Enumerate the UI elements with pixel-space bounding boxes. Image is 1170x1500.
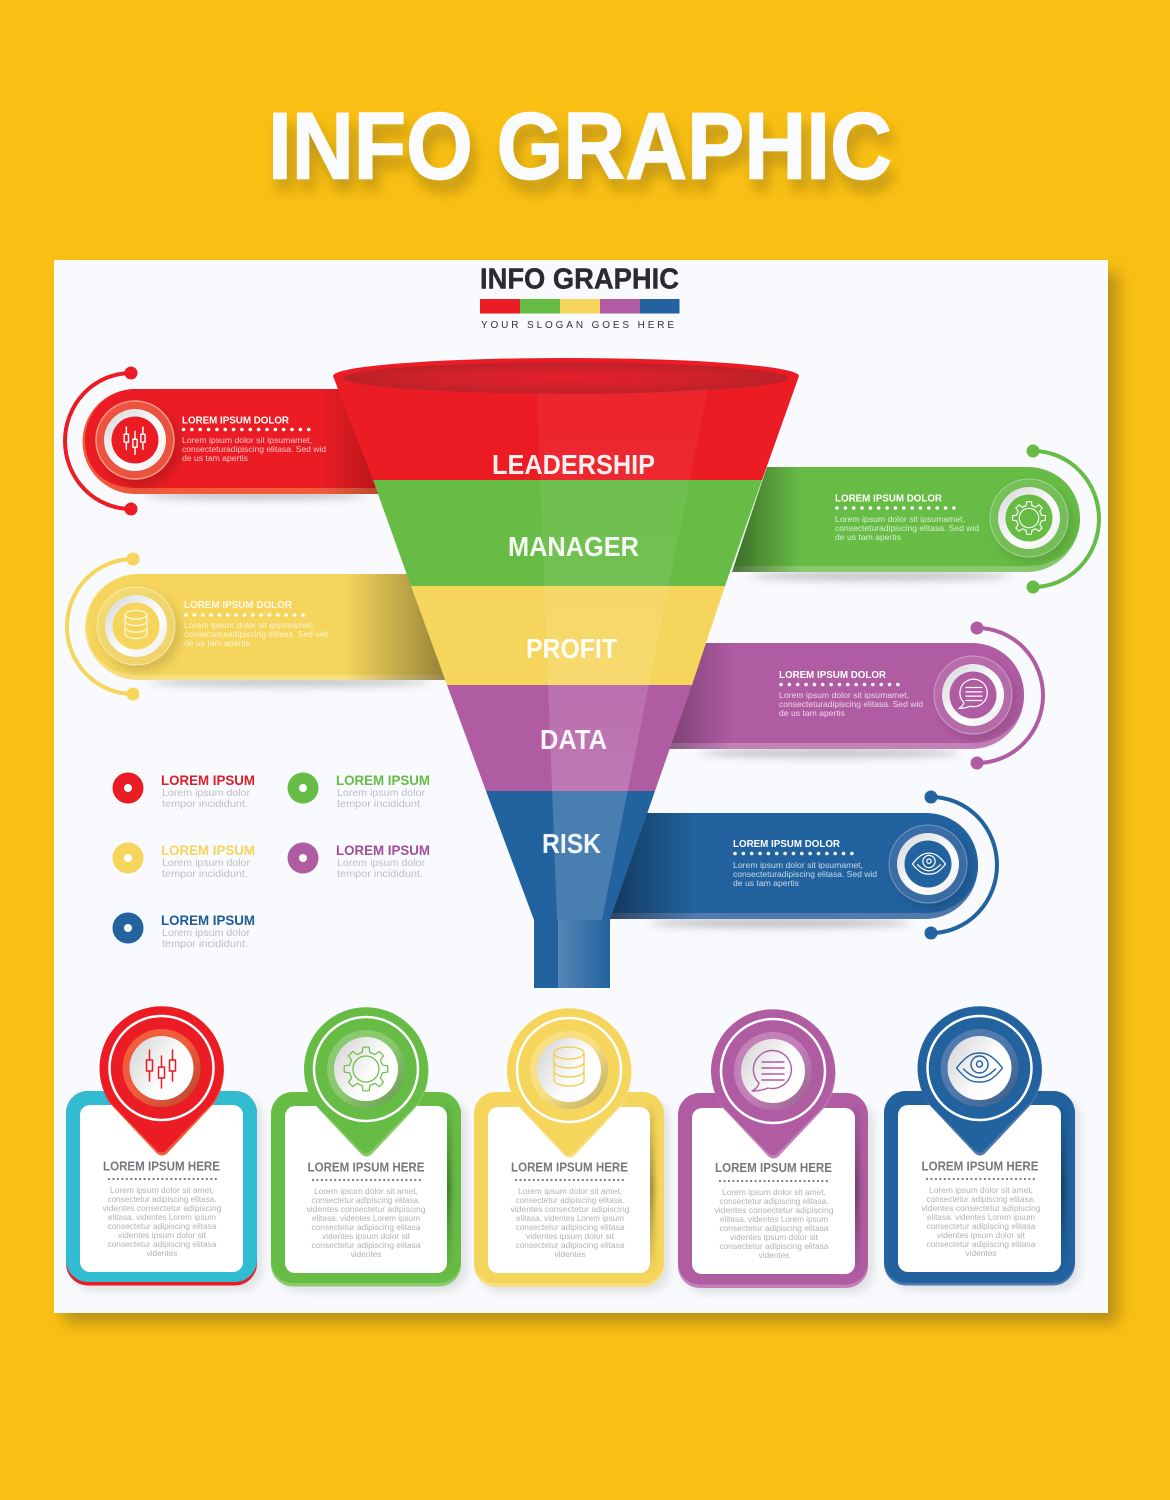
- card text: videntes ipsum dolor sit: [322, 1232, 411, 1241]
- card frame: [66, 1091, 263, 1291]
- funnel mouth: [343, 362, 789, 394]
- card pin: [304, 1007, 428, 1156]
- legend item: red: tempor incididunt.: [162, 799, 248, 810]
- card 3: yellow: [474, 1008, 670, 1293]
- band shape: [668, 643, 1024, 749]
- logo title: INFO GRAPHIC: [480, 264, 679, 296]
- legend item: purple: tempor incididunt.: [337, 869, 423, 880]
- band text: LOREM IPSUM DOLOR: [184, 599, 292, 611]
- band text: LOREM IPSUM DOLOR: [182, 414, 289, 426]
- card text: consectetur adipiscing elitasa.: [516, 1196, 624, 1205]
- card text: videntes consectetur adipiscing: [714, 1206, 834, 1215]
- band text: consecteturadipiscing elitasa. Sed wid: [733, 870, 877, 879]
- label: data: DATA: [540, 724, 607, 755]
- card 4: purple: [678, 1009, 874, 1294]
- band shape: [610, 813, 978, 919]
- card frame: [678, 1093, 874, 1294]
- label: risk: RISK: [542, 828, 601, 859]
- card text: videntes ipsum dolor sit: [526, 1232, 615, 1241]
- band text: [779, 669, 923, 718]
- band: blue: [610, 790, 997, 940]
- legend item: yellow: [112, 842, 255, 880]
- band text: Lorem ipsum dolor sit ipsumamet,: [733, 861, 863, 870]
- title: INFO GRAPHIC: [268, 94, 892, 200]
- card frame: [474, 1092, 670, 1293]
- band arc: [65, 366, 138, 516]
- card text: videntes ipsum dolor sit: [118, 1231, 207, 1240]
- legend item: purple: LOREM IPSUM: [336, 842, 430, 858]
- card text: videntes consectetur adipiscing: [922, 1204, 1040, 1213]
- panel shadow: [64, 272, 1118, 1323]
- card text: consectetur adipiscing elitasa: [312, 1241, 421, 1250]
- card text: elitasa. videntes Lorem ipsum: [312, 1214, 420, 1223]
- card 5: blue: [884, 1006, 1081, 1291]
- legend item: red: Lorem ipsum dolor: [162, 788, 251, 799]
- legend item: blue: Lorem ipsum dolor: [162, 928, 251, 939]
- band text: [835, 492, 979, 542]
- legend item: yellow: tempor incididunt.: [162, 869, 248, 880]
- band text: Lorem ipsum dolor sit ipsumamet,: [835, 515, 965, 524]
- band text: consecteturadipiscing elitasa. Sed wid: [182, 445, 326, 454]
- legend item: green: LOREM IPSUM: [336, 772, 430, 788]
- card text: elitasa. videntes Lorem ipsum: [108, 1213, 216, 1222]
- band icon: [934, 656, 1012, 734]
- card text: [306, 1160, 426, 1259]
- card frame: [884, 1091, 1081, 1291]
- legend item: red: LOREM IPSUM: [161, 772, 255, 788]
- band text: Lorem ipsum dolor sit ipsumamet,: [779, 691, 909, 700]
- card pin: [918, 1006, 1042, 1156]
- card text: LOREM IPSUM HERE: [511, 1160, 628, 1174]
- card text: videntes: [966, 1249, 996, 1258]
- card text: consectetur adipiscing elitasa: [516, 1241, 625, 1250]
- label: profit: PROFIT: [526, 633, 617, 664]
- band icon: [889, 825, 967, 903]
- band: yellow: [67, 552, 450, 700]
- band icon: [990, 479, 1068, 557]
- band arc: [970, 622, 1043, 770]
- band shadow: [700, 748, 960, 758]
- band text: consecteturadipiscing elitasa. Sed wid: [184, 630, 328, 639]
- card text: consectetur adipiscing elitasa: [516, 1223, 625, 1232]
- label: leadership: LEADERSHIP: [492, 449, 655, 480]
- band shape: [732, 467, 1080, 572]
- white panel: [54, 260, 1108, 1313]
- card text: consectetur adipiscing elitasa.: [720, 1197, 828, 1206]
- band arc: [1026, 444, 1099, 594]
- card text: consectetur adipiscing elitasa: [108, 1222, 217, 1231]
- band: green: [732, 444, 1099, 594]
- funnel segment: data: [447, 685, 692, 791]
- band text: [182, 414, 326, 463]
- funnel segment: manager: [373, 480, 762, 586]
- band text: de us tam apertis: [835, 533, 901, 542]
- band icon: [96, 401, 174, 479]
- band text: consecteturadipiscing elitasa. Sed wid: [779, 700, 923, 709]
- card 1: red: [66, 1006, 263, 1291]
- band shape: [83, 389, 385, 494]
- card text: videntes ipsum dolor sit: [937, 1231, 1026, 1240]
- funnel segment: profit: [411, 586, 725, 685]
- card text: elitasa. videntes Lorem ipsum: [720, 1215, 828, 1224]
- card text: consectetur adipiscing elitasa: [312, 1223, 421, 1232]
- card text: videntes: [350, 1250, 382, 1259]
- band arc: [924, 790, 997, 940]
- colour strip: [480, 299, 680, 314]
- card text: LOREM IPSUM HERE: [715, 1161, 832, 1175]
- band text: de us tam apertis: [184, 639, 250, 648]
- legend item: yellow: LOREM IPSUM: [161, 842, 255, 858]
- band text: [184, 599, 328, 648]
- card text: LOREM IPSUM HERE: [103, 1160, 220, 1174]
- funnel highlight: [537, 388, 708, 920]
- card text: Lorem ipsum dolor sit amet,: [314, 1187, 418, 1196]
- card text: videntes ipsum dolor sit: [730, 1233, 819, 1242]
- card text: consectetur adipiscing elitasa: [926, 1240, 1036, 1249]
- band shadow: [750, 571, 1010, 581]
- card text: Lorem ipsum dolor sit amet,: [929, 1186, 1033, 1195]
- band text: de us tam apertis: [182, 454, 248, 463]
- card text: Lorem ipsum dolor sit amet,: [110, 1186, 214, 1195]
- band shadow: [650, 918, 910, 928]
- band: red: [65, 366, 385, 516]
- label: manager: MANAGER: [508, 531, 639, 562]
- card text: elitasa. videntes Lorem ipsum: [927, 1213, 1035, 1222]
- band text: [733, 838, 877, 888]
- band text: LOREM IPSUM DOLOR: [779, 669, 886, 681]
- legend item: red: [112, 772, 255, 810]
- band arc: [67, 552, 140, 700]
- band text: LOREM IPSUM DOLOR: [835, 492, 942, 504]
- card text: videntes consectetur adipiscing: [510, 1205, 630, 1214]
- card text: [102, 1160, 222, 1258]
- band text: Lorem ipsum dolor sit ipsumamet,: [184, 621, 314, 630]
- legend item: blue: tempor incididunt.: [162, 939, 248, 950]
- card frame: [271, 1092, 467, 1292]
- band shadow: [150, 677, 430, 687]
- legend item: yellow: Lorem ipsum dolor: [162, 858, 251, 869]
- card text: consectetur adipiscing elitasa: [720, 1224, 829, 1233]
- card text: videntes: [146, 1249, 178, 1258]
- legend item: purple: [288, 842, 430, 880]
- header logo: [480, 264, 680, 331]
- band text: LOREM IPSUM DOLOR: [733, 838, 840, 850]
- card text: videntes consectetur adipiscing: [102, 1204, 222, 1213]
- band text: consecteturadipiscing elitasa. Sed wid: [835, 524, 979, 533]
- card pin: [100, 1006, 224, 1156]
- card text: [510, 1160, 630, 1259]
- legend item: green: tempor incididunt.: [337, 799, 423, 810]
- band shadow: [145, 490, 365, 500]
- band shape: [85, 574, 450, 680]
- card text: consectetur adipiscing elitasa.: [312, 1196, 420, 1205]
- card text: Lorem ipsum dolor sit amet,: [518, 1187, 622, 1196]
- card text: LOREM IPSUM HERE: [922, 1160, 1038, 1174]
- funnel: [333, 358, 799, 988]
- funnel stem: [534, 915, 610, 988]
- card 2: green: [271, 1007, 467, 1292]
- card text: consectetur adipiscing elitasa: [108, 1240, 217, 1249]
- funnel segment: leadership: [333, 358, 799, 480]
- legend: [112, 772, 430, 950]
- card text: videntes: [758, 1251, 790, 1260]
- legend item: green: Lorem ipsum dolor: [337, 788, 426, 799]
- card text: videntes consectetur adipiscing: [306, 1205, 426, 1214]
- card pin: [507, 1008, 632, 1158]
- card text: LOREM IPSUM HERE: [308, 1160, 424, 1174]
- legend item: blue: [112, 912, 255, 950]
- band text: de us tam apertis: [733, 879, 799, 888]
- band icon: [97, 587, 175, 665]
- card text: consectetur adipiscing elitasa.: [108, 1195, 216, 1204]
- card text: elitasa. videntes Lorem ipsum: [516, 1214, 624, 1223]
- legend item: purple: Lorem ipsum dolor: [337, 858, 426, 869]
- card pin: [711, 1009, 836, 1158]
- band text: Lorem ipsum dolor sit ipsumamet,: [182, 436, 312, 445]
- band text: de us tam apertis: [779, 709, 845, 718]
- band: purple: [668, 622, 1043, 770]
- slogan: YOUR SLOGAN GOES HERE: [481, 320, 674, 331]
- legend item: green: [288, 772, 430, 810]
- card text: videntes: [554, 1250, 586, 1259]
- card text: [922, 1160, 1040, 1258]
- legend item: blue: LOREM IPSUM: [161, 912, 255, 928]
- card text: consectetur adipiscing elitasa: [720, 1242, 829, 1251]
- funnel segment: risk: [486, 791, 655, 920]
- card text: Lorem ipsum dolor sit amet,: [722, 1188, 826, 1197]
- card text: [714, 1161, 834, 1260]
- card text: consectetur adipiscing elitasa: [926, 1222, 1036, 1231]
- card text: consectetur adipiscing elitasa.: [926, 1195, 1036, 1204]
